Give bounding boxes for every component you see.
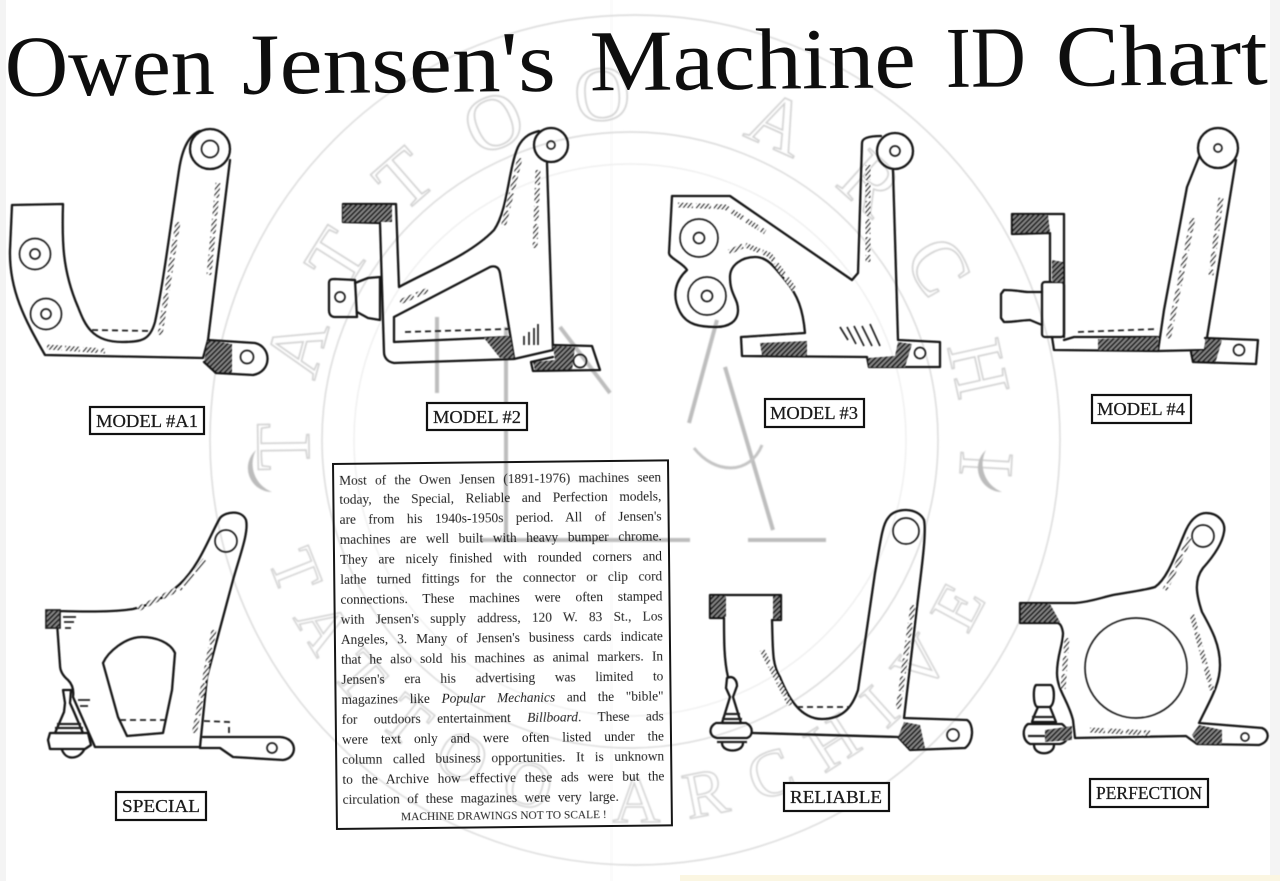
title: ID — [945, 8, 1026, 106]
machine: Reliable — [710, 510, 972, 750]
title: Machine — [589, 9, 916, 109]
label: Model #4 — [1092, 395, 1191, 423]
label: Model #3: MODEL #3 — [770, 403, 858, 423]
title: Chart — [1055, 6, 1268, 105]
text panel: history note: connections. These machines were often stamped — [340, 589, 663, 607]
label: Perfection: PERFECTION — [1096, 783, 1202, 803]
text panel: history note: to the Archive how effective these ads were but the — [342, 768, 664, 787]
label: Reliable: RELIABLE — [790, 787, 882, 807]
machine: Special — [46, 513, 294, 760]
machine: Model #A1 — [10, 129, 268, 375]
machine: Perfection — [1020, 513, 1268, 753]
text panel: history note: They are nicely finished with rounded corners and — [340, 549, 662, 567]
title — [4, 6, 1268, 115]
label: Model #4: MODEL #4 — [1097, 399, 1185, 419]
title: Jensen's — [241, 13, 556, 113]
text panel: history note: Angeles, 3. Many of Jensen's business cards indicate — [341, 629, 663, 647]
text panel: history note: column called business opportunities. It is unknown — [342, 748, 664, 767]
label: Special: SPECIAL — [122, 796, 200, 816]
text panel: history note: circulation of these magazines were very large. — [343, 789, 619, 807]
text panel: history note: MACHINE DRAWINGS NOT TO SCALE ! — [401, 809, 607, 823]
text panel: history note: today, the Special, Reliable and Perfection models, — [339, 489, 661, 507]
label: Reliable — [784, 783, 889, 811]
label: Perfection — [1090, 779, 1208, 807]
label: Special — [116, 792, 206, 820]
label: Model #A1 — [90, 407, 204, 434]
text panel: history note: are from his 1940s-1950s period. All of Jensen's — [340, 509, 662, 527]
text panel: history note: Jensen's era his advertising was limited to — [341, 668, 663, 687]
text panel: history note: were text only and were often listed under the — [342, 728, 664, 747]
text panel: history note: machines are well built with heavy bumper chrome. — [340, 529, 662, 547]
text panel: history note: that he also sold his machines as animal markers. In — [341, 649, 663, 667]
text panel: history note: lathe turned fittings for the connector or clip cord — [340, 569, 662, 587]
machine: Model #2 — [329, 128, 600, 371]
title: Owen — [4, 16, 215, 115]
label: Model #3 — [765, 399, 864, 427]
label: Model #2: MODEL #2 — [433, 407, 521, 427]
text panel: history note: with Jensen's supply address, 120 W. 83 St., Los — [341, 609, 663, 627]
text panel: history note: for outdoors entertainment Billboard. These ads — [342, 708, 664, 727]
text panel: history note — [332, 459, 673, 830]
label: Model #A1: MODEL #A1 — [96, 411, 198, 431]
label: Model #2 — [427, 403, 527, 430]
machine: Model #4 — [1001, 128, 1258, 364]
text panel: history note: Most of the Owen Jensen (1891-1976) machines seen — [339, 469, 661, 487]
watermark: tattoo archive seal: TATTOO ARCHIVE — [270, 544, 986, 824]
machine: Model #3 — [669, 133, 940, 367]
text panel: history note: magazines like Popular Mechanics and the "bible" — [341, 688, 664, 707]
